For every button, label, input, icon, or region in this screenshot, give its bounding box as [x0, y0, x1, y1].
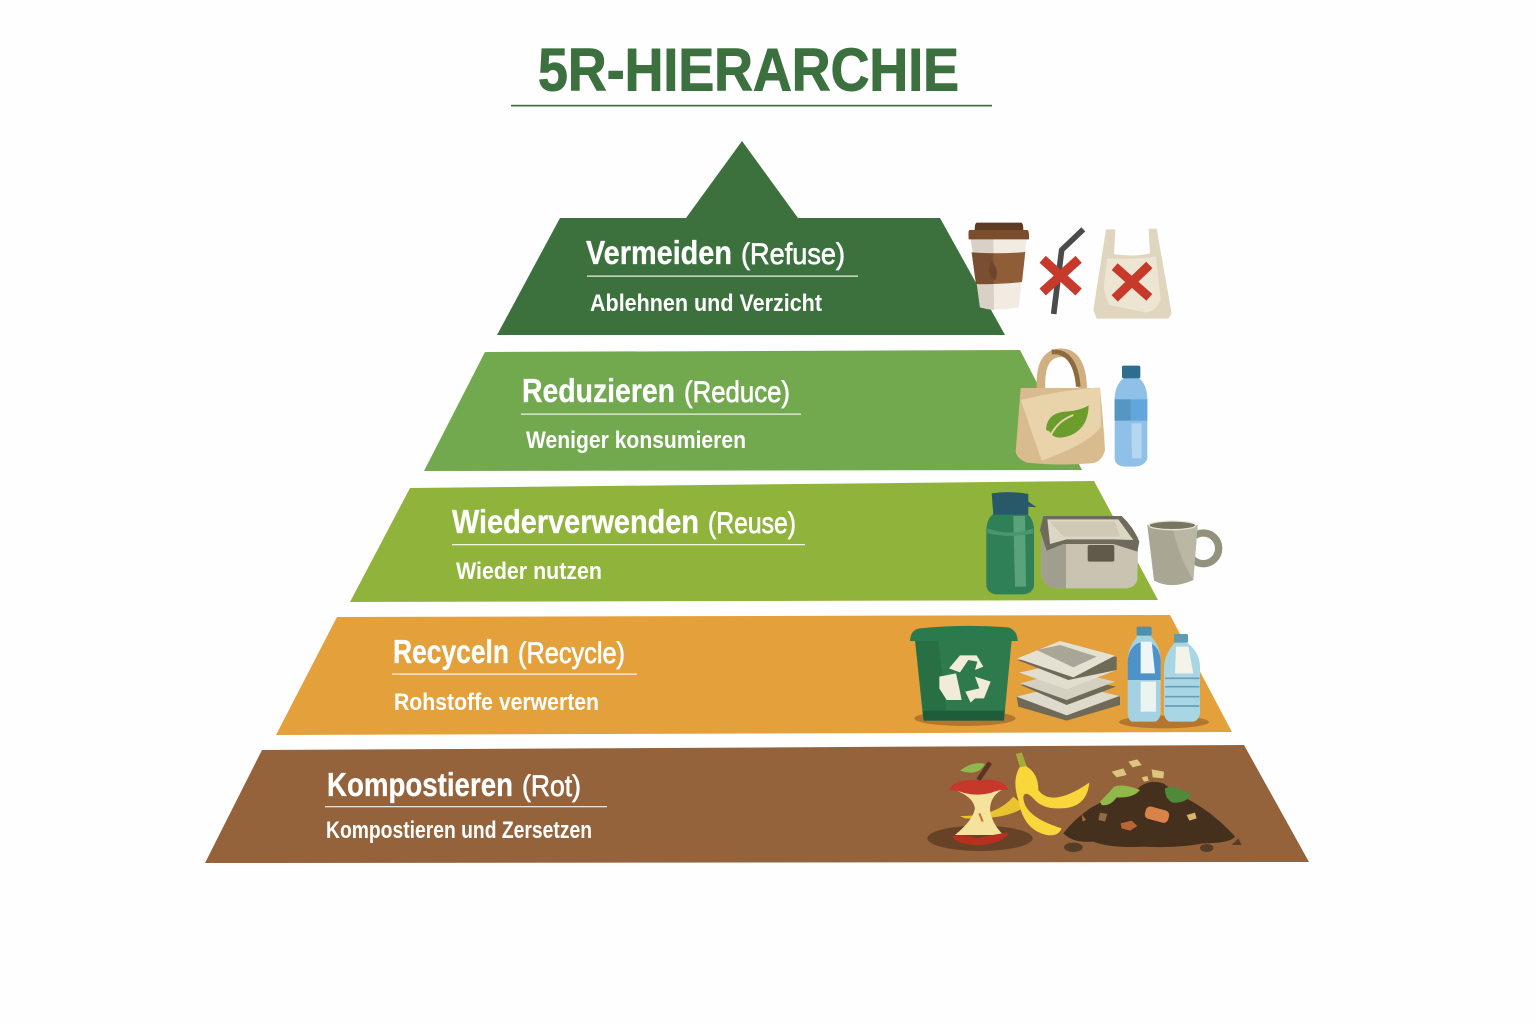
- icon: crossed-out plastic bag: [1093, 229, 1172, 319]
- tier 5: Kompostieren: Kompostieren: [327, 766, 513, 803]
- icon: mug: [1147, 521, 1219, 585]
- icons: refuse and reduce: [968, 223, 1172, 467]
- tier 2: Reduzieren: Weniger konsumieren: [526, 427, 746, 454]
- tier 5: Kompostieren: Kompostieren und Zersetzen: [326, 817, 592, 844]
- tier 1: Vermeiden: Vermeiden: [586, 234, 732, 271]
- tier 4: Recyceln: [276, 615, 1232, 735]
- tier 4: Recyceln: Rohstoffe verwerten: [394, 689, 599, 716]
- tier 1: Vermeiden: [497, 141, 1005, 335]
- tier 3: Wiederverwenden: [350, 481, 1158, 602]
- icon: coffee cup: [968, 223, 1029, 310]
- tier 2: Reduzieren: Reduzieren: [522, 372, 675, 409]
- tier 1: Vermeiden: Ablehnen und Verzicht: [590, 290, 822, 317]
- icon: apple core: [949, 763, 1008, 845]
- tier 5: Kompostieren: [205, 745, 1309, 863]
- icon: stack of paper: [1017, 641, 1120, 721]
- icon: banana peel: [960, 753, 1089, 835]
- icon: green recycling bin: [910, 626, 1018, 726]
- icons: reuse and recycle: [910, 492, 1219, 728]
- icon: water bottle: [1115, 366, 1147, 467]
- icon: recycling symbol: [939, 655, 991, 703]
- icon: apple core shadow: [927, 826, 1033, 851]
- tier 3: Wiederverwenden: (Reuse): [708, 507, 796, 540]
- icon: reusable flask: [986, 492, 1037, 594]
- title: 5R-HIERARCHIE: [538, 36, 959, 104]
- icon: lunch box: [1040, 516, 1139, 588]
- icon: compost heap: [1063, 759, 1242, 852]
- tier 5: Kompostieren: (Rot): [522, 770, 581, 803]
- tier 4: Recyceln: (Recycle): [518, 637, 625, 670]
- icon: crossed-out straw: [1043, 229, 1083, 314]
- tier 3: Wiederverwenden: Wieder nutzen: [456, 558, 602, 585]
- tier 2: Reduzieren: (Reduce): [684, 376, 790, 409]
- tier 1: Vermeiden: (Refuse): [741, 238, 845, 271]
- tier 4: Recyceln: Recyceln: [393, 633, 509, 670]
- tier 2: Reduzieren: [424, 350, 1082, 471]
- icons: compost: [927, 753, 1242, 852]
- icon: recycling bottles: [1119, 627, 1209, 728]
- tier 3: Wiederverwenden: Wiederverwenden: [452, 503, 699, 540]
- icon: tote bag with leaf: [1016, 352, 1105, 465]
